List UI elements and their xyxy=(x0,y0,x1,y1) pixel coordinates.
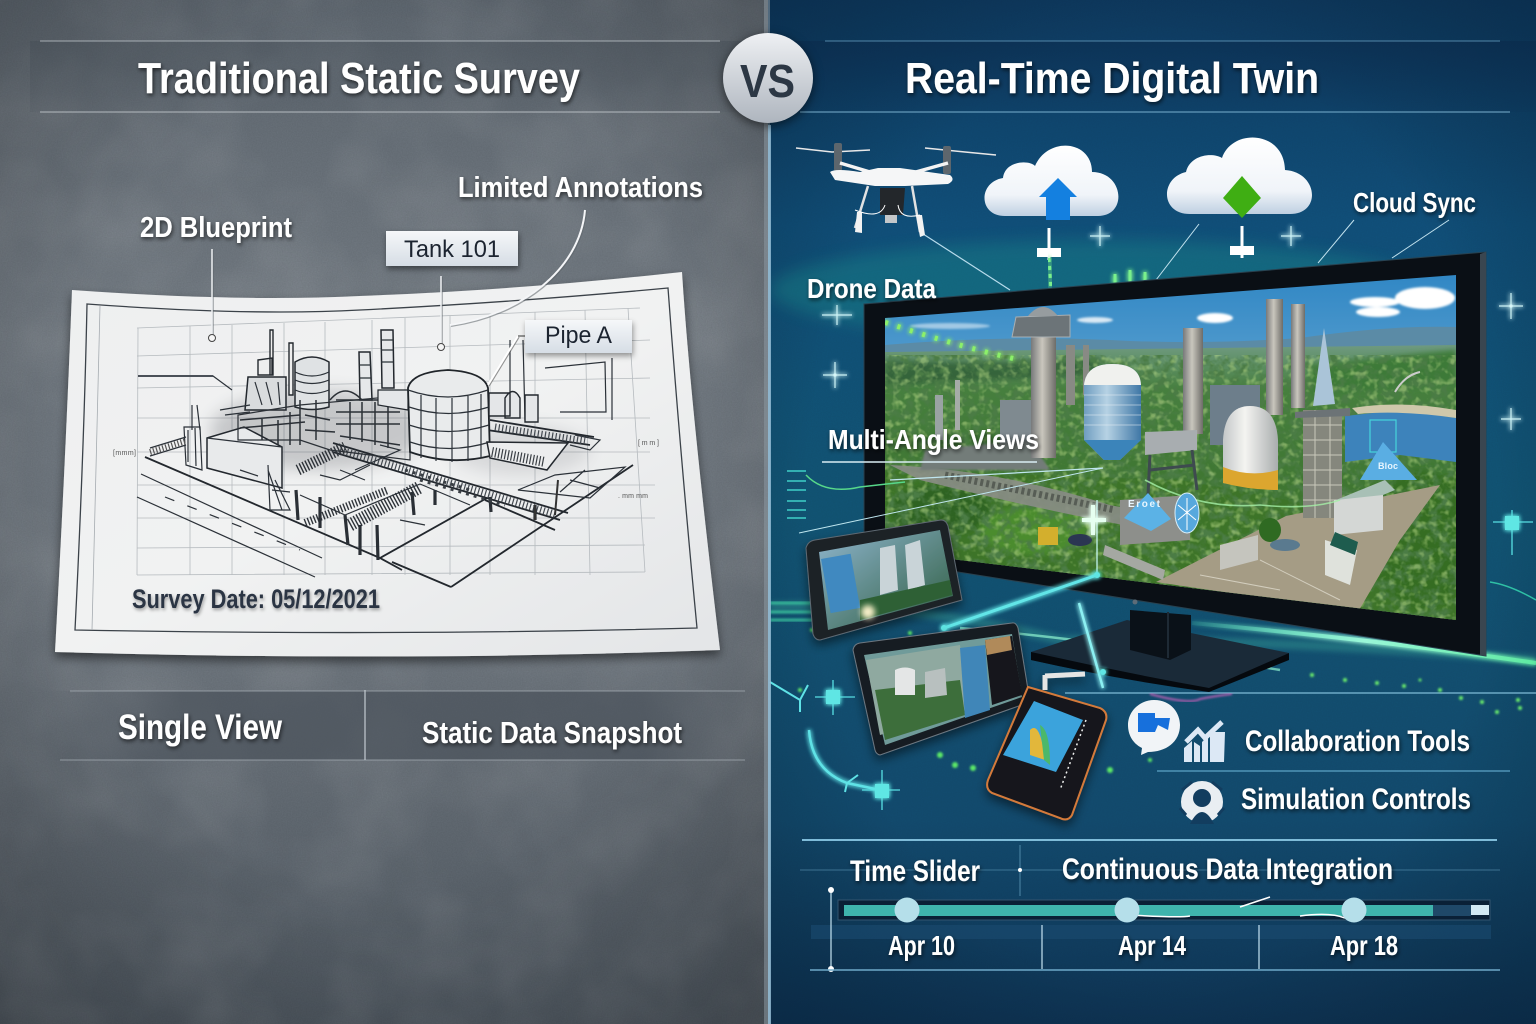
data lines and nodes xyxy=(770,468,1533,810)
static data snapshot label: Static Data Snapshot xyxy=(422,715,682,750)
stacks xyxy=(1183,328,1203,434)
lower green ground xyxy=(885,470,1456,620)
right heading: Real-Time Digital Twin xyxy=(905,54,1319,103)
tablet two xyxy=(853,623,1030,755)
feature bar: single view and static data snapshot xyxy=(40,690,750,760)
scene data overlays xyxy=(885,318,1016,364)
callout: limited annotations xyxy=(450,172,703,326)
blue storage tank xyxy=(1084,364,1141,460)
callout: cloud sync: Cloud Sync xyxy=(1353,187,1476,218)
panel: real-time digital twin xyxy=(768,0,1536,1024)
plant sketch: . mm mm xyxy=(618,493,648,500)
low buildings xyxy=(1334,492,1383,535)
label: Pipe A: Pipe A xyxy=(545,322,612,349)
callout: cloud sync xyxy=(1318,187,1476,263)
fence hatch xyxy=(298,447,345,470)
date Apr 10: Apr 10 xyxy=(888,930,955,961)
label: Tank 101: Tank 101 xyxy=(404,236,500,263)
dimension marks: [mmm] xyxy=(113,450,136,457)
plant sketch: [mm] xyxy=(638,440,659,447)
right side plant xyxy=(510,340,612,420)
survey date: Survey Date: 05/12/2021 xyxy=(132,584,380,614)
river and bank xyxy=(1345,410,1456,462)
blueprint grid xyxy=(137,308,655,575)
support frame xyxy=(1145,430,1197,455)
slider handle Apr 10 xyxy=(894,898,920,922)
monitor stand xyxy=(1031,610,1289,692)
long pipe rack xyxy=(333,420,594,520)
monitor bezel xyxy=(864,252,1486,656)
icon: cloud download xyxy=(1115,137,1312,285)
lattice tower xyxy=(1303,410,1342,518)
blueprint sheet xyxy=(55,272,720,657)
monitor xyxy=(848,252,1486,692)
slider track xyxy=(838,897,1490,920)
time slider label: Time Slider xyxy=(850,855,980,888)
main tower xyxy=(1031,330,1056,458)
VS badge xyxy=(723,33,813,123)
distant plant blocks xyxy=(1000,400,1031,444)
panel: time slider xyxy=(800,840,1500,972)
simulation controls label: Simulation Controls xyxy=(1241,783,1471,816)
label: Tank 101 xyxy=(386,231,518,350)
phone xyxy=(987,674,1106,819)
connector: upload plug xyxy=(1037,228,1061,290)
callout: multi-angle views: Multi-Angle Views xyxy=(828,424,1039,455)
callout: 2D blueprint xyxy=(140,212,292,342)
date Apr 14: Apr 14 xyxy=(1118,930,1186,961)
icon: analytics chart xyxy=(1184,722,1225,762)
data streams behind monitor xyxy=(770,240,1536,714)
collaboration tools label: Collaboration Tools xyxy=(1245,725,1470,758)
digital twin plant scene: Eroet xyxy=(1128,499,1161,510)
label: Pipe A xyxy=(488,320,632,386)
icon: drone xyxy=(796,143,1010,290)
process machinery xyxy=(245,377,286,410)
icon: cloud upload xyxy=(984,146,1118,290)
center divider xyxy=(764,0,771,1024)
VS badge: VS xyxy=(740,55,795,107)
slider handle Apr 18 xyxy=(1342,898,1366,922)
callout: drone data: Drone Data xyxy=(807,273,936,304)
sparkles xyxy=(822,226,1523,430)
digital twin plant scene xyxy=(885,275,1456,620)
slider handle Apr 14 xyxy=(1114,898,1140,922)
icon: simulation gear xyxy=(1180,781,1224,824)
callout: limited annotations: Limited Annotations xyxy=(458,172,703,204)
storage tank xyxy=(408,370,490,460)
digital twin plant scene: Bloc xyxy=(1378,461,1398,471)
tablet one xyxy=(806,520,962,640)
box building xyxy=(207,427,282,488)
callout: 2D blueprint: 2D Blueprint xyxy=(140,212,292,244)
continuous data integration label: Continuous Data Integration xyxy=(1062,853,1393,886)
plant sketch xyxy=(113,330,659,587)
icon: chat bubble xyxy=(1128,700,1180,755)
panel: traditional static survey xyxy=(0,0,768,1024)
date Apr 18: Apr 18 xyxy=(1330,930,1398,961)
left heading: Traditional Static Survey xyxy=(138,54,580,103)
white and yellow tank xyxy=(1223,406,1278,490)
connector: download plug xyxy=(1230,226,1254,276)
vegetation texture xyxy=(885,355,1456,640)
single view label: Single View xyxy=(118,708,283,747)
